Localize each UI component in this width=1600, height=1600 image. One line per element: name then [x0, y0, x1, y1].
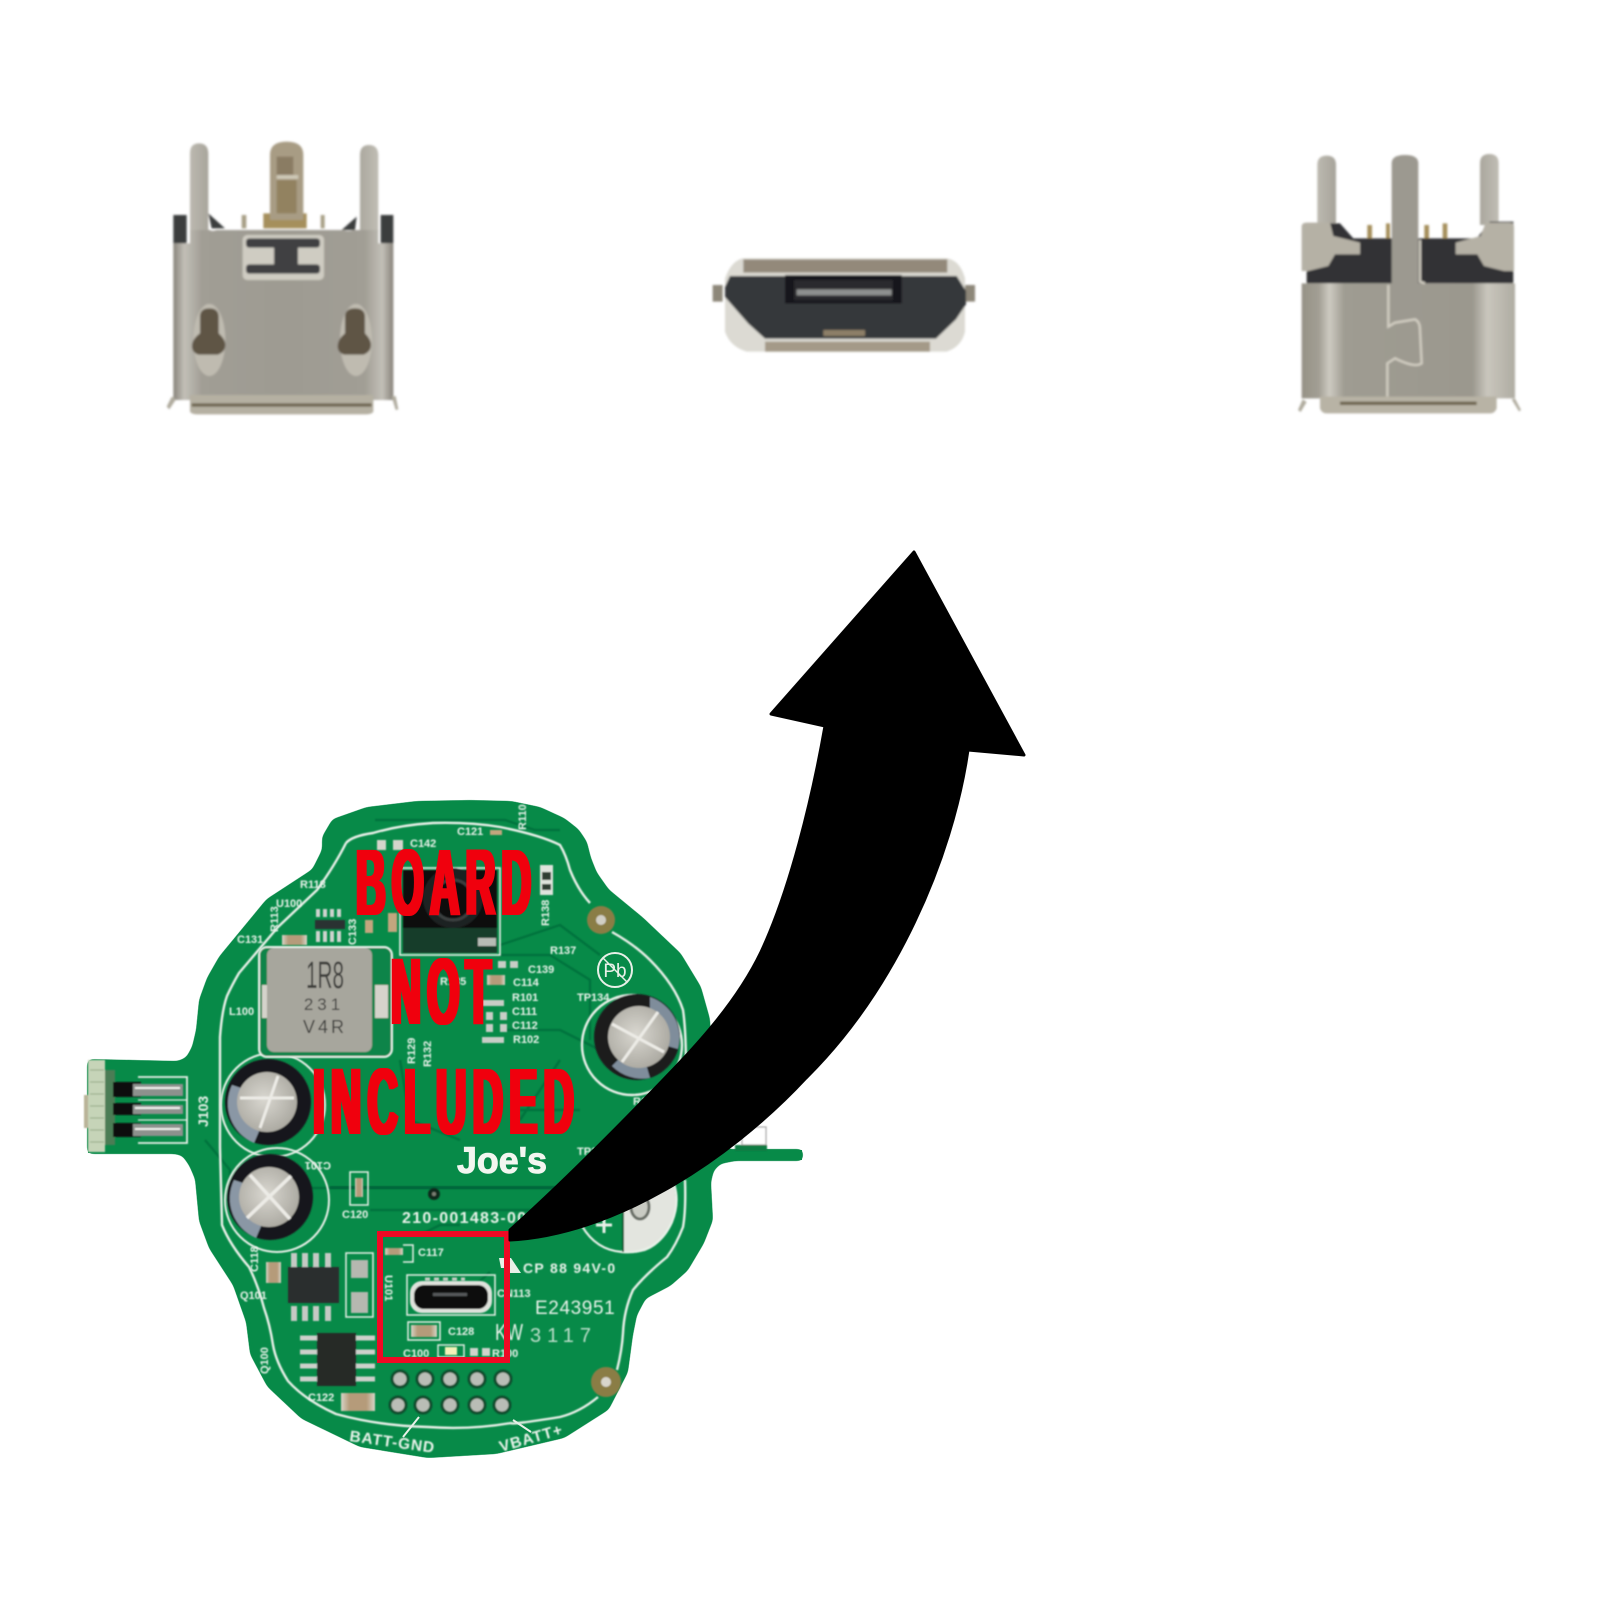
camera module block: [400, 868, 500, 955]
mounting pads and centre hole: [428, 906, 621, 1397]
connector: front view with port opening: [713, 258, 975, 352]
silkscreen labels: E243951: [535, 1298, 615, 1319]
battery polarity pad: [582, 1184, 677, 1252]
silkscreen labels: C121: [457, 826, 483, 838]
silkscreen labels: L100: [229, 1006, 254, 1018]
board: right side tab with white block: [735, 1127, 767, 1151]
board: white silkscreen outline: [220, 823, 686, 1428]
circuit board (not included): [84, 801, 802, 1457]
small parts near port: [385, 1245, 490, 1357]
inductor L100: 231: [304, 995, 344, 1014]
silkscreen labels: R141: [633, 1096, 659, 1108]
logo: Joe's: Joe's: [457, 1140, 547, 1181]
micro USB port on board: [407, 1275, 495, 1315]
silkscreen labels: R102: [513, 1034, 539, 1046]
inductor L100: 1R8: [306, 955, 344, 997]
connector: back view with slot and holes: [167, 142, 398, 414]
silkscreen labels: C131: [237, 934, 263, 946]
board: square tab ends: [88, 1062, 802, 1160]
capacitor: upper left: [221, 1053, 325, 1157]
silkscreen labels: C128: [448, 1326, 474, 1338]
chip Q100: [300, 1333, 375, 1386]
silkscreen labels: R100: [492, 1348, 518, 1360]
silkscreen labels: BATT-GND: [348, 1428, 436, 1457]
silkscreen labels: R101: [512, 992, 538, 1004]
callout: red highlight around port: [380, 1234, 507, 1360]
lead-free Pb symbol: [598, 953, 632, 987]
silkscreen labels: C120: [342, 1209, 368, 1221]
silkscreen labels: R129: [406, 1038, 418, 1064]
silkscreen labels: KW: [495, 1319, 523, 1345]
board: green PCB outline: [88, 801, 802, 1457]
silkscreen labels: [195, 804, 659, 1457]
silkscreen labels: C101: [305, 1159, 331, 1171]
silkscreen labels: J103: [195, 1096, 211, 1127]
silkscreen labels: C139: [528, 964, 554, 976]
silkscreen labels: 3117: [530, 1325, 597, 1347]
capacitor: right: [582, 994, 682, 1095]
arrow: from port up to connector: [510, 552, 1024, 1240]
silkscreen labels: C133: [347, 919, 359, 945]
silkscreen labels: C122: [308, 1392, 334, 1404]
silkscreen labels: U101: [382, 1275, 394, 1301]
lead-free Pb symbol: Pb: [603, 961, 627, 982]
edge connector J103: [84, 1060, 187, 1152]
silkscreen labels: R135: [440, 976, 466, 988]
silkscreen labels: R132: [422, 1041, 434, 1067]
silkscreen labels: C117: [418, 1247, 444, 1259]
silkscreen labels: U100: [276, 898, 302, 910]
surface mount components: [266, 830, 553, 1411]
through-hole solder pads: [390, 1371, 511, 1413]
silkscreen labels: TP134: [577, 992, 610, 1004]
silkscreen labels: Q100: [259, 1347, 271, 1374]
inductor L100: V4R: [303, 1017, 347, 1037]
silkscreen leader lines: [403, 1417, 531, 1437]
silkscreen labels: 210-001483-001: [402, 1210, 538, 1227]
heading: BOARD NOT INCLUDED: BOARD: [356, 831, 537, 936]
heading: BOARD NOT INCLUDED: INCLUDED: [313, 1050, 580, 1155]
inductor L100: [259, 947, 392, 1057]
silkscreen labels: CP 88 94V-0: [523, 1260, 616, 1276]
silkscreen labels: C111: [512, 1006, 537, 1018]
silkscreen labels: C118: [249, 1246, 261, 1272]
board: dark horizontal band: [330, 1186, 620, 1189]
capacitor: lower left: [225, 1148, 329, 1252]
UL certification mark: [499, 1258, 521, 1273]
silkscreen labels: TP131: [577, 1146, 609, 1158]
silkscreen labels: R110: [517, 804, 529, 830]
silkscreen labels: R138: [540, 900, 552, 926]
heading: BOARD NOT INCLUDED: NOT: [391, 940, 497, 1045]
heading: BOARD NOT INCLUDED: [313, 831, 580, 1155]
board: copper traces: [205, 820, 620, 1290]
silkscreen labels: VBATT+: [497, 1421, 565, 1456]
silkscreen labels: C112: [512, 1020, 538, 1032]
silkscreen labels: R118: [300, 879, 326, 891]
silkscreen labels: CN113: [497, 1288, 531, 1300]
silkscreen labels: R137: [550, 945, 576, 957]
silkscreen labels: Q101: [240, 1290, 267, 1302]
silkscreen labels: C100: [403, 1348, 429, 1360]
connector: side view with folded clasp: [1298, 154, 1521, 413]
silkscreen labels: C114: [513, 977, 540, 989]
silkscreen labels: R113: [269, 906, 281, 932]
chip Q101: [288, 1253, 339, 1321]
silkscreen labels: C142: [410, 838, 436, 850]
